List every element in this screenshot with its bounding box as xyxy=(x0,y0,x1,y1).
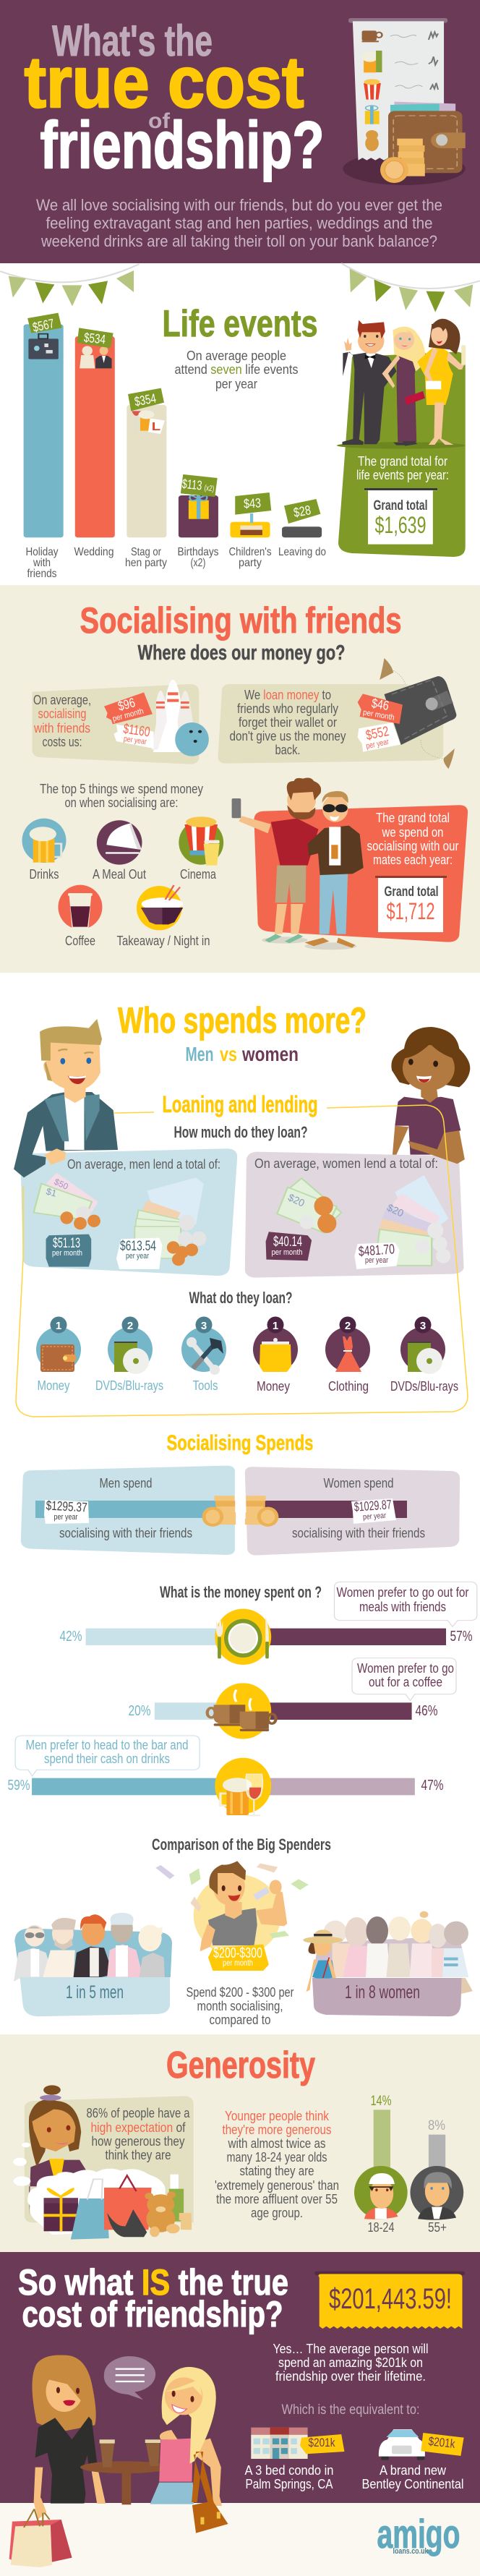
illustration: woman xyxy=(391,1027,470,1164)
icon: banknotes and coins xyxy=(266,1175,450,1269)
illustration: big spender xyxy=(155,1861,309,1971)
panel: women socialising spend xyxy=(245,1467,460,1556)
panel: loaning money: back. xyxy=(275,743,301,757)
panel: socialising cost: per year xyxy=(123,735,147,746)
panel: socialising cost: costs us: xyxy=(42,735,82,749)
bar chart: life event costs: $28 xyxy=(292,503,312,520)
panel: men socialising spend: socialising with their friends xyxy=(59,1526,192,1540)
panel: socialising cost: $1160 xyxy=(122,722,151,740)
text block: younger people xyxy=(215,2109,339,2220)
panel: women loan amounts: $481.70 xyxy=(358,1242,395,1260)
receipt: life events grand total: Grand total xyxy=(373,498,428,513)
text block: younger people: many 18-24 year olds xyxy=(227,2150,327,2165)
title: true cost xyxy=(25,42,304,123)
icon row: loaned items xyxy=(36,1316,458,1394)
icon: takeaway xyxy=(117,885,210,948)
icon: cinema: Cinema xyxy=(180,867,217,882)
panel: men loan amounts: $51.13 xyxy=(53,1236,80,1251)
panel: women loan amounts: On average, women lend a total of: xyxy=(254,1156,438,1171)
panel: socialising with friends xyxy=(0,585,480,973)
heading: who spends more: Who spends more? xyxy=(118,1000,367,1041)
panel: high expectation: think they are xyxy=(106,2148,171,2162)
panel: women loan amounts: $20 xyxy=(286,1191,307,1209)
panel: socialising cost: On average, xyxy=(33,693,91,707)
title: What's the xyxy=(52,17,213,65)
bar chart: life event costs: L xyxy=(152,419,160,432)
bar labels: Children's xyxy=(228,546,272,558)
logo: amigo: loans.co.uk xyxy=(393,2547,429,2556)
subheading: men vs women: women xyxy=(241,1043,299,1065)
bar labels: hen party xyxy=(125,557,167,569)
callout: women coffee: Women prefer to go xyxy=(357,1661,454,1676)
panel: socialising cost: with friends xyxy=(33,721,90,735)
chart: generosity by age xyxy=(354,2094,463,2235)
callout: men drinks xyxy=(15,1736,200,1776)
panel: men socialising spend: Men spend xyxy=(100,1476,152,1490)
chart: money spent by gender: 59% xyxy=(7,1778,30,1794)
panel: women socialising spend: per year xyxy=(363,1511,387,1522)
icon: drinks xyxy=(22,819,66,882)
subheading: men vs women: Men xyxy=(185,1043,214,1065)
text block: lifetime spend xyxy=(273,2342,428,2384)
icon: beer and wine xyxy=(215,1758,271,1816)
icon: men tools: 3 xyxy=(201,1320,207,1332)
panel: 1 in 5 men: 1 in 5 men xyxy=(66,1982,124,2003)
panel: socialising cost: socialising xyxy=(38,707,87,721)
panel: loaning money: don't give us the money xyxy=(230,729,346,743)
bar labels: Wedding xyxy=(74,546,114,558)
icon: men dvds: 2 xyxy=(127,1320,133,1332)
panel: loaning money: per year xyxy=(365,738,390,751)
icon: women clothing: 2 xyxy=(345,1320,351,1332)
text block: lifetime spend: spend an amazing $201k on xyxy=(278,2355,423,2370)
icon: older person xyxy=(410,2166,463,2220)
panel: socialising grand total: mates each year: xyxy=(373,853,453,867)
icon: men dvds: DVDs/Blu-rays xyxy=(95,1378,163,1393)
panel: men loan amounts: $613.54 xyxy=(120,1239,156,1254)
panel: women loan amounts: per month xyxy=(272,1248,302,1257)
panel: loaning money xyxy=(218,658,456,769)
subheading: men vs women: vs xyxy=(220,1043,237,1065)
panel: women socialising spend: $1029.87 xyxy=(353,1497,392,1514)
panel: loaning money: forget their wallet or xyxy=(239,715,337,730)
equivalent: car xyxy=(361,2429,464,2491)
bar labels: party xyxy=(239,557,262,569)
icon: men money: 1 xyxy=(56,1320,61,1332)
icon: men dvds xyxy=(95,1316,163,1393)
icon: women clothing xyxy=(325,1316,370,1394)
panel: generosity xyxy=(0,2034,480,2252)
icon: receipt and wallet xyxy=(343,18,466,185)
heading: life events: Life events xyxy=(162,303,318,345)
icon: coins xyxy=(202,1496,236,1527)
icon: coins xyxy=(245,1496,278,1527)
bar labels: Birthdays xyxy=(178,546,218,558)
panel: women loan amounts: $20 xyxy=(385,1201,406,1219)
subheading: comparison of the big spenders: Comparison of the Big Spenders xyxy=(152,1835,331,1854)
icon: women money: Money xyxy=(257,1379,290,1394)
text block: younger people: the more affluent over 55 xyxy=(216,2192,338,2206)
icon: men tools: Tools xyxy=(192,1378,218,1393)
chart: money spent by gender: 47% xyxy=(421,1778,444,1794)
icon: women money xyxy=(253,1316,298,1394)
panel: high expectation: high expectation of xyxy=(91,2120,186,2135)
panel: socialising grand total: The grand total xyxy=(376,811,450,825)
panel: 1 in 8 women xyxy=(303,1911,473,2016)
icon: women clothing: Clothing xyxy=(328,1379,369,1394)
equivalent: condo: $201k xyxy=(308,2436,335,2449)
chart: money spent by gender: 57% xyxy=(450,1629,473,1645)
panel: loaning money: $46 xyxy=(370,696,390,713)
panel: loaning money: $552 xyxy=(364,724,390,743)
panel: men loan amounts: $1 xyxy=(45,1186,58,1199)
text block: intro xyxy=(36,196,442,250)
icon: men money: Money xyxy=(38,1378,69,1393)
panel: 1 in 8 women: 1 in 8 women xyxy=(345,1982,420,2003)
equivalent: condo: A 3 bed condo in xyxy=(244,2463,334,2478)
panel: who spends more xyxy=(7,1000,477,2027)
illustration: man xyxy=(14,1019,118,1177)
panel: high expectation: how generous they xyxy=(91,2134,185,2149)
text block: younger people: stating they are xyxy=(240,2164,314,2178)
subheading: men vs women xyxy=(185,1043,299,1065)
text block: top 5 things xyxy=(40,782,203,810)
heading: loaning and lending: Loaning and lending xyxy=(162,1091,318,1117)
panel: loaning money: friends who regularly xyxy=(237,701,338,716)
callout: men drinks: Men prefer to head to the bar and xyxy=(26,1738,188,1752)
text block: intro: We all love socialising with our friends, but do you ever get the xyxy=(36,196,442,214)
callout: men drinks: spend their cash on drinks xyxy=(44,1752,170,1766)
callout: women meals: meals with friends xyxy=(359,1600,446,1614)
chart: generosity by age: 18-24 xyxy=(367,2220,395,2235)
bar labels: (x2) xyxy=(191,557,205,569)
title: of xyxy=(148,109,171,133)
text block: younger people: with almost twice as xyxy=(228,2136,325,2151)
chart: money spent by gender xyxy=(7,1609,473,1816)
panel: socialising grand total: socialising with our xyxy=(367,839,458,853)
bar chart: life event costs xyxy=(24,313,326,580)
panel: men socialising spend: $1295.37 xyxy=(46,1498,87,1514)
receipt: life events grand total xyxy=(364,488,437,545)
receipt: life events grand total: $1,639 xyxy=(374,512,427,538)
text block: lifetime spend: Yes… The average person will xyxy=(273,2342,428,2356)
panel: life events grand total: The grand total for xyxy=(358,454,447,469)
text block: top 5 things: The top 5 things we spend money xyxy=(40,782,203,796)
icon: plate and cutlery xyxy=(215,1609,271,1665)
text block: spend 200-300: month socialising, xyxy=(197,1999,283,2013)
panel: socialising grand total: we spend on xyxy=(382,825,444,840)
text block: spend 200-300 xyxy=(187,1985,293,2027)
callout: women coffee: out for a coffee xyxy=(369,1675,442,1689)
panel: life events grand total: life events per year: xyxy=(356,468,449,482)
text block: equivalent to: Which is the equivalent to: xyxy=(282,2402,419,2418)
panel: true cost conclusion xyxy=(0,2252,480,2576)
panel: socialising cost xyxy=(32,680,209,764)
title: friendship? xyxy=(40,108,324,182)
illustration: group of women xyxy=(324,1911,473,1994)
text block: seven life events xyxy=(175,349,298,391)
text block: younger people: 'extremely generous' than xyxy=(215,2178,339,2193)
text block: intro: feeling extravagant stag and hen parties, weddings and the xyxy=(46,214,432,232)
subheading: where does our money go: Where does our money go? xyxy=(137,641,346,665)
panel: women loan amounts: $40.14 xyxy=(273,1234,302,1250)
icon: women money: 1 xyxy=(273,1320,278,1332)
callout: women meals xyxy=(334,1582,477,1626)
icon: women dvds: 3 xyxy=(420,1320,426,1332)
illustration: party guests xyxy=(337,319,466,449)
icon: bunting xyxy=(0,263,480,312)
icon: young person xyxy=(354,2166,408,2219)
panel: life events xyxy=(0,263,480,580)
bar labels: Stag or xyxy=(131,546,162,558)
bar labels: with xyxy=(33,557,51,569)
icon: men money xyxy=(36,1316,81,1393)
icon: cinema xyxy=(179,816,223,882)
bar labels xyxy=(26,546,326,580)
equivalent: condo: Palm Springs, CA xyxy=(246,2477,333,2491)
illustration: big spender: $200-$300 xyxy=(213,1945,262,1961)
panel: men loan amounts: per month xyxy=(52,1249,82,1258)
illustration: two friends chatting xyxy=(9,2355,228,2567)
border line: loaning frame xyxy=(16,1105,468,1417)
icon: coffee xyxy=(58,885,102,948)
chart: generosity by age: 8% xyxy=(428,2118,445,2133)
equivalent: car: A brand new xyxy=(380,2463,447,2478)
equivalent: car: $201k xyxy=(428,2434,456,2451)
panel: life events grand total xyxy=(337,319,466,557)
heading: so what is the true cost: cost of friendship? xyxy=(22,2294,283,2334)
subheading: what is the money spent on: What is the money spent on ? xyxy=(160,1583,322,1601)
icon: takeaway: Takeaway / Night in xyxy=(117,934,210,948)
heading: socialising with friends: Socialising with friends xyxy=(80,600,402,641)
bar chart: life event costs: $43 xyxy=(243,495,262,511)
heading: socialising spends: Socialising Spends xyxy=(166,1431,314,1455)
panel: socialising cost: per month xyxy=(111,707,145,723)
panel: loaning money: We loan money to xyxy=(244,688,331,702)
icon: banknotes and coins xyxy=(34,1173,206,1269)
panel: socialising cost: $96 xyxy=(116,695,137,714)
callout: women coffee xyxy=(352,1658,456,1701)
chart: money spent by gender: 42% xyxy=(59,1629,82,1645)
bar chart: life event costs: $567 xyxy=(31,316,56,335)
chart: money spent by gender: 20% xyxy=(129,1703,151,1719)
icon: a meal out xyxy=(93,820,146,882)
equivalent: car: Bentley Continental xyxy=(361,2477,464,2491)
subheading: how much do they loan: How much do they loan? xyxy=(173,1123,308,1141)
bar chart: life event costs: $354 xyxy=(133,391,158,409)
icon: coffee cups xyxy=(207,1683,276,1739)
chart: money spent by gender: 46% xyxy=(415,1703,438,1719)
heading: so what is the true cost: So what IS the true xyxy=(18,2262,288,2303)
title xyxy=(25,17,324,182)
text block: intro: weekend drinks are all taking their toll on your bank balance? xyxy=(40,232,437,250)
panel: women loan amounts xyxy=(245,1152,464,1278)
text block: younger people: they're more generous xyxy=(223,2123,331,2137)
icon: a meal out: A Meal Out xyxy=(93,867,146,882)
receipt: socialising grand total xyxy=(375,876,447,932)
icon: women dvds xyxy=(390,1316,458,1394)
text block: seven life events: On average people xyxy=(187,349,286,363)
illustration: big spender: per month xyxy=(223,1958,253,1968)
heading: generosity: Generosity xyxy=(166,2044,315,2086)
text block: younger people: Younger people think xyxy=(225,2109,330,2123)
illustration: woman in hat xyxy=(303,1929,343,1992)
panel: high expectation: 86% of people have a xyxy=(87,2106,190,2120)
icon: women dvds: DVDs/Blu-rays xyxy=(390,1379,458,1394)
panel: high expectation xyxy=(13,2085,194,2240)
bar labels: friends xyxy=(27,568,56,580)
panel: men loan amounts: per year xyxy=(126,1252,149,1261)
text block: spend 200-300: Spend $200 - $300 per xyxy=(187,1985,293,2000)
chart: generosity by age: 14% xyxy=(370,2094,392,2109)
panel: socialising grand total xyxy=(232,778,468,950)
panel: header xyxy=(0,0,480,263)
icon: coffee: Coffee xyxy=(65,934,95,948)
equivalent: condo xyxy=(244,2428,344,2491)
text block: seven life events: attend seven life events xyxy=(175,362,298,377)
receipt: socialising grand total: $1,712 xyxy=(386,898,435,924)
text block: lifetime spend: friendship over their lifetime. xyxy=(275,2369,426,2384)
panel: women socialising spend: Women spend xyxy=(324,1476,393,1490)
receipt: socialising grand total: Grand total xyxy=(385,884,438,900)
panel: women socialising spend: socialising with their friends xyxy=(292,1526,425,1540)
heading: so what is the true cost xyxy=(18,2262,288,2334)
illustration: woman thinking of gifts xyxy=(13,2085,192,2240)
panel: 1 in 5 men xyxy=(14,1913,172,2016)
panel: men loan amounts: On average, men lend a total of: xyxy=(67,1157,220,1172)
panel: men socialising spend xyxy=(21,1466,236,1555)
illustration: two friends taking a selfie xyxy=(232,778,364,950)
text block: spend 200-300: compared to xyxy=(210,2013,270,2027)
text block: seven life events: per year xyxy=(215,377,257,391)
text block: top 5 things: on when socialising are: xyxy=(65,796,178,810)
bar chart: life event costs: $534 xyxy=(83,330,106,347)
bar labels: Holiday xyxy=(26,546,58,558)
panel: men loan amounts: $50 xyxy=(53,1177,70,1192)
icon: drinks: Drinks xyxy=(29,867,59,882)
panel: loaning money: per month xyxy=(362,708,395,722)
panel: women loan amounts: per year xyxy=(365,1256,388,1265)
illustration: group of men xyxy=(14,1913,165,1982)
text block: younger people: age group. xyxy=(251,2206,303,2220)
icon: men tools xyxy=(181,1316,226,1393)
chart: generosity by age: 55+ xyxy=(428,2220,447,2235)
panel: men socialising spend: per year xyxy=(53,1513,78,1522)
panel: men loan amounts xyxy=(21,1148,237,1276)
bar chart: life event costs: $113 (x2) xyxy=(181,477,215,494)
bar labels: Leaving do xyxy=(278,546,326,558)
callout: total cost xyxy=(314,2272,465,2329)
subheading: what do they loan: What do they loan? xyxy=(189,1289,292,1307)
